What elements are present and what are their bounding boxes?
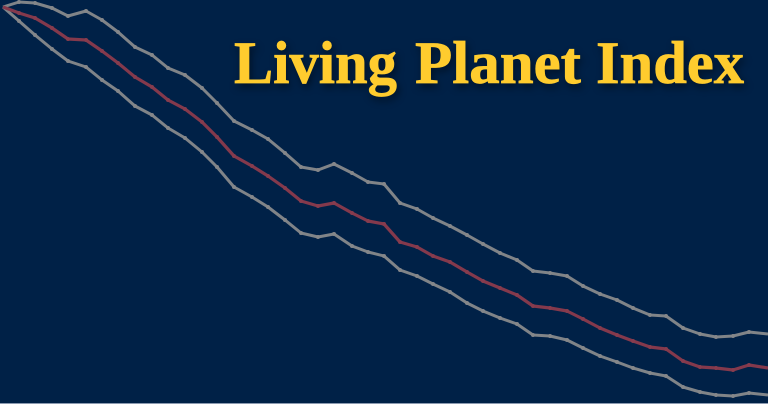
title: Index bbox=[596, 30, 744, 96]
title: Planet bbox=[415, 30, 581, 96]
title: Living bbox=[234, 30, 397, 96]
